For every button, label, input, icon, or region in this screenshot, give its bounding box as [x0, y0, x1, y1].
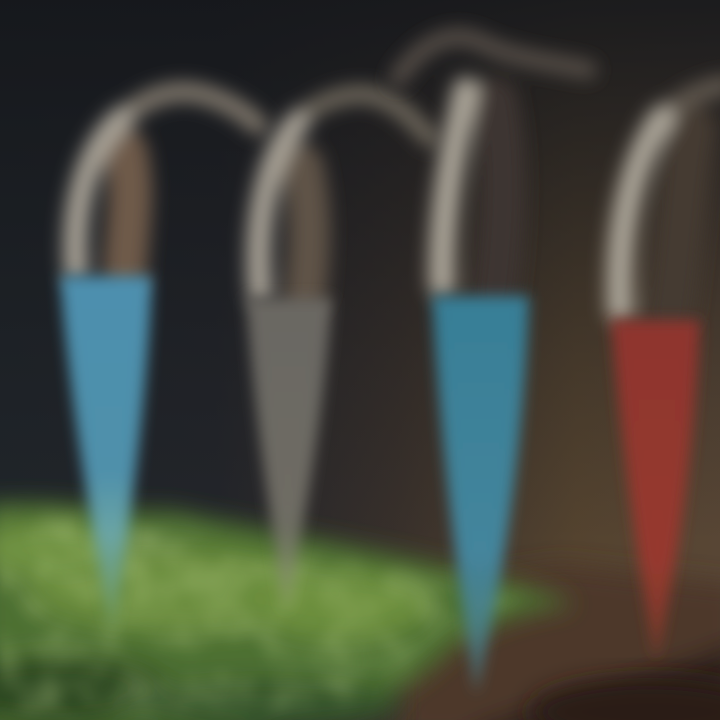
soil: brown ground on the right [400, 565, 720, 720]
stake 3 blue wedge [432, 296, 529, 695]
stake 3 hook [398, 37, 588, 295]
stake 1 blue wedge [60, 276, 152, 635]
foreground soil clod [530, 678, 720, 720]
stake 2 grey wedge [246, 298, 332, 612]
stake 3: blue [398, 37, 588, 695]
stake 4: red [611, 85, 720, 662]
stake 2: grey [246, 94, 430, 612]
stake 4 red wedge [611, 320, 700, 662]
stake 2 hook [259, 94, 430, 295]
stake 1 hook [75, 92, 258, 270]
stake 1: blue [60, 92, 258, 635]
foliage: green moss on the left [0, 488, 570, 720]
stake 4 hook [619, 85, 720, 315]
